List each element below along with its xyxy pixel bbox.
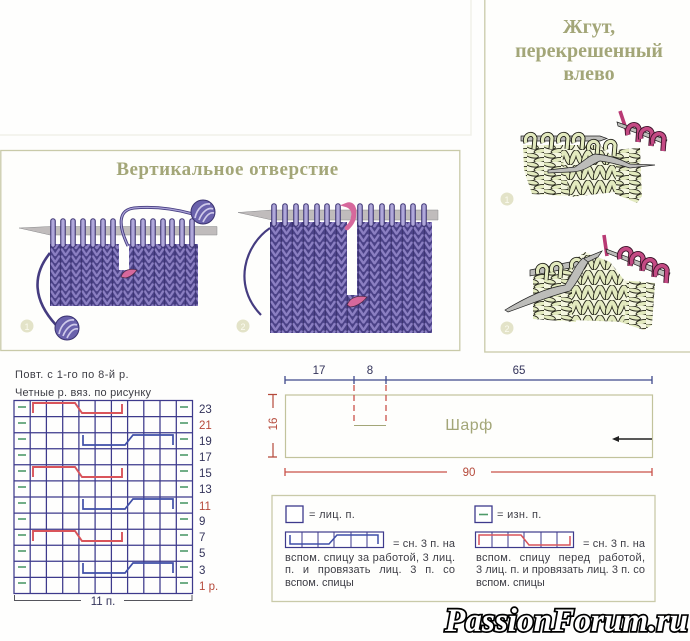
- pink marker stitch: [121, 269, 137, 278]
- right needle: [617, 122, 667, 144]
- right cross cable key: вспом. спицу за работой, 3 лиц.: [285, 552, 455, 564]
- width label 11 stitches: 11 п.: [91, 596, 115, 608]
- row numbers: 5: [199, 548, 205, 560]
- illustration step 2: [500, 235, 670, 334]
- knit stitch key: = лиц. п.: [309, 509, 355, 521]
- row numbers: 15: [199, 468, 212, 480]
- row numbers: [199, 404, 218, 593]
- knitted swatch right: [270, 222, 432, 333]
- step badge 1: [20, 320, 34, 332]
- heading: cable crossed left: Жгут,: [563, 16, 615, 38]
- purl stitch key: [475, 506, 542, 522]
- right cross cable key: п. и провязать лиц. 3 п. со: [285, 564, 455, 576]
- chart caption: Повт. с 1-го по 8-й р.: [15, 369, 129, 381]
- step badge 2: [236, 320, 250, 332]
- cable needle: [548, 154, 655, 173]
- yarn ball lower: [55, 316, 79, 340]
- pink stitches: [628, 125, 664, 151]
- right needle: [606, 249, 670, 278]
- illustration step 2: [236, 205, 438, 333]
- row numbers: 17: [199, 452, 212, 464]
- needle: [19, 226, 217, 235]
- right cross cable key: вспом. спицы: [285, 577, 354, 589]
- step badge 1: 1: [24, 322, 30, 332]
- pink loop at top: [347, 205, 354, 228]
- illustration step 1: [500, 111, 667, 206]
- pink stitches: [620, 249, 667, 283]
- dimension 8: 8: [367, 365, 373, 377]
- row numbers: 7: [199, 532, 205, 544]
- main needle: [530, 251, 602, 276]
- bottom dimension ruler 90: 90: [463, 467, 475, 479]
- purl fabric: [523, 145, 570, 196]
- scarf outline: [286, 395, 652, 458]
- left cross cable key: 3 лиц. п. и провязать лиц. 3 п. со: [476, 564, 645, 576]
- left cross cable key: вспом. спицы: [476, 577, 545, 589]
- chart caption: Четные р. вяз. по рисунку: [15, 387, 152, 399]
- legend box: [272, 496, 655, 602]
- watermark: PassionForum.ru: [444, 603, 688, 639]
- yarn ball upper: [191, 200, 215, 224]
- grid: [14, 400, 192, 594]
- direction arrow: [612, 436, 652, 442]
- yarn tail: [244, 228, 270, 315]
- row numbers: 9: [199, 516, 205, 528]
- cable fabric: [560, 145, 616, 197]
- knitted swatch left: [50, 244, 198, 306]
- left-cross cable symbols: [33, 403, 122, 541]
- right-cross cable symbols: [83, 435, 173, 573]
- purl fabric: [533, 268, 576, 322]
- scarf schematic: [268, 365, 652, 479]
- dimension 17: 17: [313, 365, 325, 377]
- cable fabric: [572, 252, 628, 322]
- row numbers: 21: [199, 420, 212, 432]
- dimension 65: 65: [513, 365, 525, 377]
- step badge 1: [500, 192, 514, 206]
- step badge 1: 1: [504, 195, 510, 205]
- step badge 2: [500, 322, 514, 334]
- illustration step 1: [19, 200, 217, 340]
- top dimension ruler: [285, 376, 652, 384]
- right cross cable key: = сн. 3 п. на: [393, 538, 456, 550]
- left cross cable key: [476, 532, 646, 589]
- stitches on needle: [274, 206, 424, 224]
- height dimension 16: 16: [268, 418, 280, 430]
- panel: vertical hole: [1, 150, 460, 350]
- panel: cable crossed left: [485, 0, 690, 352]
- scarf label: Шарф: [445, 417, 493, 434]
- cable needle: [505, 258, 588, 312]
- row numbers: 11: [199, 501, 211, 513]
- row numbers: 1 р.: [199, 581, 218, 593]
- pink marker stitch: [347, 296, 367, 307]
- step badge 2: 2: [240, 322, 246, 332]
- chart caption: [15, 369, 152, 399]
- row numbers: 19: [199, 436, 212, 448]
- step badge 2: 2: [504, 324, 510, 334]
- heading: cable crossed left: перекрешенный: [515, 40, 663, 62]
- bottom dimension ruler 90: [285, 467, 652, 479]
- main needle: [521, 136, 607, 141]
- slot: [354, 385, 386, 426]
- row numbers: 13: [199, 484, 212, 496]
- knitting chart: [14, 400, 218, 608]
- width label 11 stitches: [14, 595, 192, 608]
- heading: cable crossed left: влево: [563, 63, 615, 85]
- row numbers: 23: [199, 404, 212, 416]
- left cross cable key: = сн. 3 п. на: [583, 538, 646, 550]
- purl stitch key: = изн. п.: [497, 509, 542, 521]
- stitches on main needle: [525, 134, 615, 156]
- yarn to lower ball: [38, 253, 56, 325]
- pink yarn: [604, 235, 607, 256]
- empty upper-left panel: [0, 0, 471, 135]
- yarn to upper ball: [121, 207, 193, 246]
- stitches on left needle: [537, 259, 581, 280]
- needle: [238, 210, 438, 220]
- pink yarn: [620, 111, 628, 135]
- knit stitch key: [286, 506, 355, 522]
- stitches on needle: [53, 221, 192, 245]
- purl marks: [18, 407, 188, 583]
- heading: vertical hole: Вертикальное отверстие: [116, 159, 339, 180]
- row numbers: 3: [199, 565, 205, 577]
- right cross cable key: [285, 532, 456, 589]
- left cross cable key: вспом. спицу перед работой,: [476, 552, 645, 564]
- height dimension 16: [268, 394, 280, 457]
